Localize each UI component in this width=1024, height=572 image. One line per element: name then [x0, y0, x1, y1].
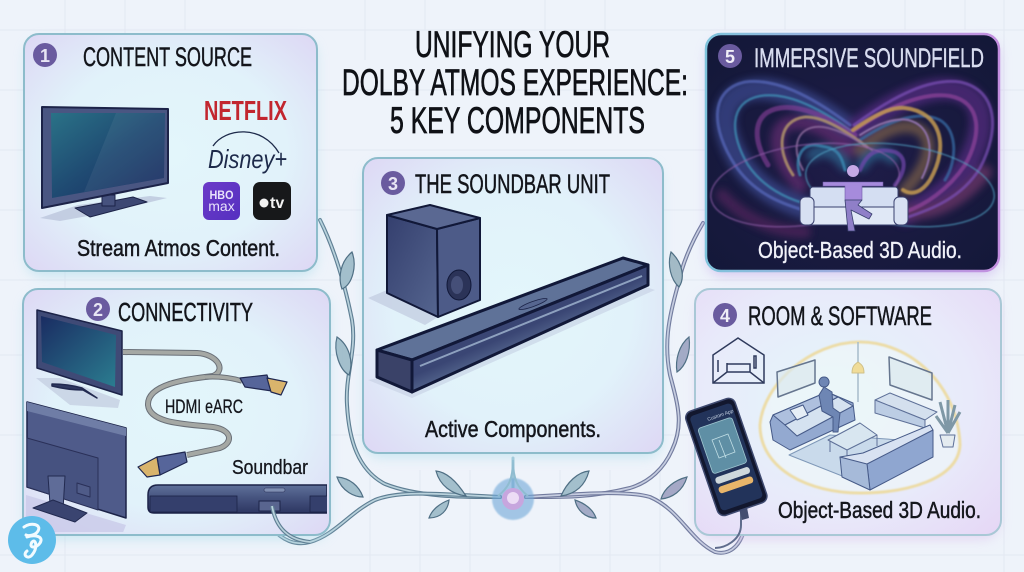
- number badge 4: [713, 303, 737, 327]
- icon: HDMI connector upper: [240, 375, 287, 395]
- seated person: [819, 377, 840, 432]
- logo: HBO Max: [203, 182, 240, 220]
- icon: front TV: [36, 310, 122, 408]
- heading: content source: CONTENT SOURCE: [83, 42, 252, 72]
- icon: soundbar: [368, 258, 655, 398]
- icon: television: [40, 107, 168, 221]
- heading: the soundbar unit: THE SOUNDBAR UNIT: [415, 169, 610, 199]
- right sofa: [840, 425, 933, 468]
- number badge 2: [86, 297, 110, 321]
- number badge 2: 2: [93, 300, 103, 320]
- icon: subwoofer: [368, 205, 480, 325]
- number badge 5: [718, 44, 742, 68]
- number badge 3: [381, 171, 405, 195]
- label: HDMI eARC: HDMI eARC: [165, 397, 243, 418]
- icon: HDMI connector lower: [138, 452, 187, 477]
- number badge 5: 5: [725, 47, 735, 67]
- number badge 4: 4: [720, 306, 730, 326]
- vines connecting panels: [272, 220, 746, 553]
- logo: HBO Max: max: [208, 198, 235, 214]
- icon: smartphone with room app: [684, 396, 769, 548]
- number badge 1: [33, 43, 57, 67]
- heading: connectivity: CONNECTIVITY: [118, 297, 253, 327]
- cable from soundbar to vine: [272, 506, 310, 542]
- number badge 1: 1: [40, 46, 50, 66]
- icon: house outline: [713, 338, 764, 383]
- logo: Disney+: Disney+: [208, 144, 287, 174]
- icon: HDMI cable: [123, 352, 242, 455]
- caption: object-based 3D audio: Object-Based 3D Audio.: [758, 237, 962, 263]
- title: [342, 24, 688, 141]
- icon: soundbar front: [148, 485, 328, 513]
- caption: object-based 3D audio: Object-Based 3D Audio.: [778, 497, 981, 523]
- logo badge: [8, 516, 56, 564]
- icon: rear of TV: [26, 402, 126, 540]
- left sofa: [770, 392, 855, 450]
- label: soundbar: Soundbar: [232, 457, 308, 479]
- panel 5: immersive soundfield: [705, 34, 1000, 276]
- panel 1: content source: [24, 34, 317, 276]
- caption: stream atmos content: Stream Atmos Content.: [77, 235, 280, 261]
- illustration: room in sound dome: [760, 342, 960, 493]
- plant: [936, 400, 960, 447]
- caption: active components: Active Components.: [425, 416, 601, 442]
- title: DOLBY ATMOS EXPERIENCE:: [342, 62, 688, 103]
- rug and table: [789, 435, 900, 487]
- title: UNIFYING YOUR: [415, 24, 610, 65]
- panel 3: the soundbar unit: [363, 158, 663, 457]
- central glowing orb: [492, 460, 534, 520]
- logo: HBO Max: HBO: [210, 188, 234, 202]
- cabinet: [875, 393, 937, 420]
- vine leaves: [336, 252, 689, 518]
- title: 5 KEY COMPONENTS: [390, 100, 645, 141]
- panel 4: room and software: [695, 289, 1001, 539]
- logo: Apple TV: [253, 182, 291, 220]
- icon: smartphone with room app: Custom App: [707, 408, 735, 423]
- heading: room and software: ROOM & SOFTWARE: [748, 301, 932, 331]
- logo: Apple TV: tv: [270, 195, 284, 212]
- swirl: sound waves: [705, 81, 1000, 238]
- number badge 3: 3: [388, 174, 398, 194]
- logo: Disney+: [208, 132, 287, 174]
- icon: person on sofa: [800, 165, 908, 231]
- panel 2: connectivity: [23, 289, 330, 540]
- logo: Netflix: NETFLIX: [204, 95, 287, 126]
